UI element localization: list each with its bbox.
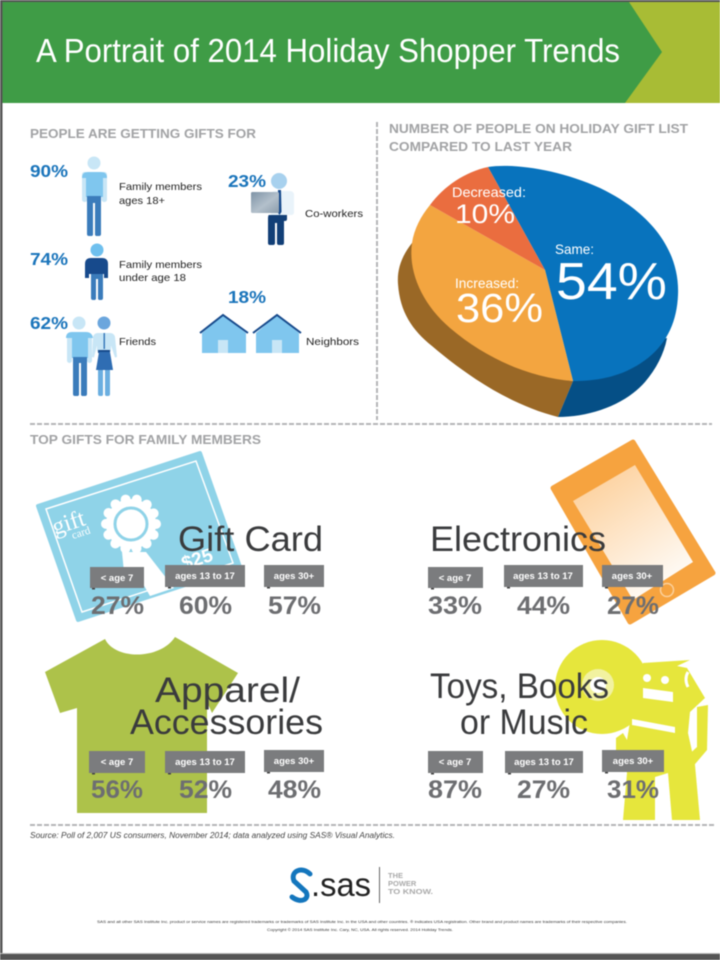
tag group: electronics ages: ages 30+	[612, 571, 653, 582]
label: toys, books or music	[430, 667, 609, 742]
label: decreased: 10%	[455, 199, 515, 229]
icon: phone	[553, 442, 713, 622]
tag group: apparel ages: ages 30+	[274, 756, 315, 767]
stat: family members ages 18+: Family members	[119, 181, 202, 193]
label: increased: 36%	[456, 285, 543, 331]
heading: top gifts for family members: TOP GIFTS FOR FAMILY MEMBERS	[30, 432, 261, 447]
stat: neighbors: 18%	[228, 287, 266, 307]
label: decreased	[452, 184, 526, 229]
tag group: electronics ages: < age 7	[439, 573, 471, 584]
stat: family members ages 18+	[30, 156, 202, 236]
tag group: apparel ages	[89, 750, 324, 774]
icon: gift card: gift	[49, 506, 89, 541]
heading: number of people on holiday gift list: COMPARED TO LAST YEAR	[389, 139, 573, 154]
SAS logo: THE	[388, 871, 403, 880]
stat: co-workers: Co-workers	[305, 208, 363, 220]
icon: disc and robot	[555, 640, 708, 820]
stat: family members under age 18	[30, 244, 202, 300]
header banner	[0, 2, 720, 103]
label: toys, books or music: or Music	[460, 703, 588, 742]
tag group: toys ages: ages 30+	[613, 756, 654, 767]
panel: gift list pie	[389, 121, 688, 417]
label: apparel / accessories	[130, 671, 323, 742]
label: decreased: Decreased:	[452, 184, 526, 200]
percentages: gift card: 60%	[179, 592, 232, 620]
icon: gift card	[38, 453, 240, 620]
tag group: gift card ages: ages 30+	[274, 571, 315, 582]
legal text: SAS and all other SAS Institute Inc. product or service names are registered trademarks or trademarks of SAS Institute Inc. in the USA and other countries. ® indicates USA registration. Other brand and product names are trademarks of their respective companies.	[97, 920, 627, 924]
legal text	[97, 920, 627, 932]
percentages: apparel: 52%	[179, 776, 232, 804]
stat: family members under age 18: Family members	[119, 259, 202, 271]
percentages: toys: 87%	[428, 776, 482, 804]
stat: family members ages 18+: ages 18+	[119, 195, 165, 207]
SAS logo	[292, 866, 433, 903]
tag group: gift card ages: < age 7	[101, 573, 133, 584]
percentages: apparel: 48%	[268, 776, 321, 804]
icon: gift card: card	[70, 524, 92, 542]
tag group: apparel ages: < age 7	[101, 757, 133, 768]
panel: people are getting gifts for	[30, 126, 363, 396]
heading: number of people on holiday gift list	[389, 121, 688, 154]
panel: toys	[428, 640, 708, 820]
tag group: gift card ages	[90, 565, 324, 590]
stat: family members under age 18: 74%	[30, 249, 68, 269]
percentages: toys	[428, 776, 659, 804]
label: apparel / accessories: Apparel/	[155, 671, 300, 710]
stat: friends: Friends	[119, 336, 156, 348]
percentages: apparel: 56%	[91, 776, 143, 804]
percentages: electronics: 27%	[607, 592, 659, 620]
stat: co-workers: 23%	[228, 171, 266, 191]
heading: number of people on holiday gift list: NUMBER OF PEOPLE ON HOLIDAY GIFT LIST	[389, 121, 688, 136]
stat: co-workers	[228, 171, 363, 245]
legal text: Copyright © 2014 SAS Institute Inc. Cary, NC, USA. All rights reserved. 2014 Holiday Trends.	[267, 928, 453, 932]
tag group: toys ages: < age 7	[439, 757, 471, 768]
stat: friends	[30, 313, 156, 396]
SAS logo: .sas	[311, 866, 371, 903]
SAS logo: TO KNOW.	[388, 887, 433, 896]
percentages: toys: 31%	[607, 776, 659, 804]
heading: people are getting gifts for: PEOPLE ARE GETTING GIFTS FOR	[30, 126, 257, 141]
percentages: gift card: 27%	[91, 592, 144, 620]
stat: family members under age 18: under age 18	[119, 272, 186, 284]
icon: t-shirt	[45, 637, 238, 813]
stat: neighbors	[200, 287, 359, 353]
percentages: toys: 27%	[517, 776, 570, 804]
label: increased: Increased:	[455, 275, 519, 291]
tag group: electronics ages: ages 13 to 17	[513, 571, 573, 582]
label: same: 54%	[556, 253, 667, 311]
label: electronics: Electronics	[430, 520, 606, 559]
tag group: toys ages	[428, 750, 664, 774]
pie chart	[398, 166, 678, 417]
percentages: electronics	[428, 592, 659, 620]
stat: family members ages 18+: 90%	[30, 161, 68, 181]
tag group: apparel ages: ages 13 to 17	[175, 757, 235, 768]
percentages: electronics: 44%	[517, 592, 570, 620]
source note: Source: Poll of 2,007 US consumers, November 2014; data analyzed using SAS® Visual Analytics.	[30, 830, 395, 840]
label: toys, books or music: Toys, Books	[430, 667, 609, 706]
tag group: toys ages: ages 13 to 17	[514, 757, 574, 768]
percentages: gift card	[91, 592, 321, 620]
panel: electronics	[428, 442, 713, 622]
label: same: Same:	[555, 241, 594, 257]
tag group: electronics ages	[428, 565, 663, 590]
label: apparel / accessories: Accessories	[130, 703, 323, 742]
percentages: apparel	[91, 776, 321, 804]
SAS logo: POWER	[388, 879, 417, 888]
icon: gift card: $25	[179, 545, 216, 575]
percentages: gift card: 57%	[268, 592, 321, 620]
tag group: gift card ages: ages 13 to 17	[175, 571, 235, 582]
percentages: electronics: 33%	[428, 592, 482, 620]
panel: apparel	[45, 637, 324, 813]
title: A Portrait of 2014 Holiday Shopper Trends	[36, 32, 620, 69]
stat: friends: 62%	[30, 313, 68, 333]
stat: neighbors: Neighbors	[306, 336, 359, 348]
label: gift card: Gift Card	[178, 520, 323, 559]
panel: gift card	[38, 453, 324, 620]
